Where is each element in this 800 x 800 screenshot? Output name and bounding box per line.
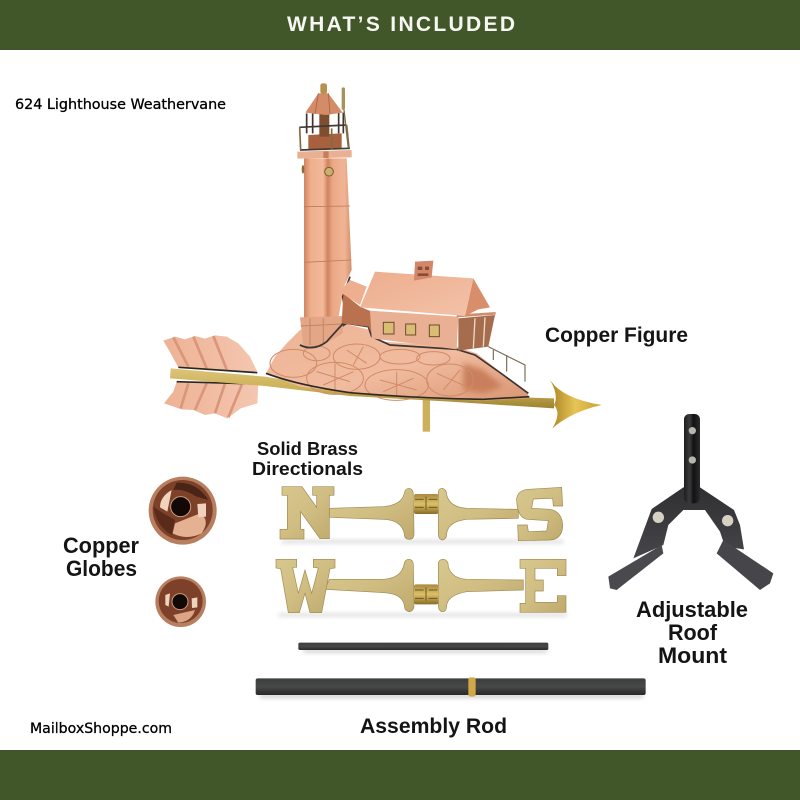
yoke [633,487,744,558]
label: copper figure: Copper Figure [545,324,688,347]
house [339,261,525,382]
north-south arm [280,487,563,541]
footer band [0,750,800,800]
letter N [280,487,334,539]
label: adjustable roof mount: Mount [658,643,728,668]
west-east arm [276,559,566,613]
adjustable roof mount [608,414,773,590]
port windows [325,167,333,176]
product name: 624 Lighthouse Weathervane [15,97,226,113]
copper globes [149,477,217,627]
letter W [276,559,335,613]
house wall [370,311,458,349]
stair railing [488,347,525,382]
chimney [414,261,433,281]
tower base [300,316,343,347]
brass collar [468,677,476,697]
title: WHAT’S INCLUDED [287,13,515,36]
arrow tail feathers [163,335,258,418]
porch [458,315,495,351]
label: adjustable roof mount [636,597,748,668]
annex [342,293,372,333]
gallery deck [297,150,352,159]
vertical mounting stem [423,398,430,432]
label: solid brass directionals: Directionals [252,459,363,479]
arrow head [549,378,602,428]
label: assembly rod: Assembly Rod [360,715,507,738]
tower [297,150,352,348]
label: adjustable roof mount: Roof [668,620,718,645]
roof [360,272,473,316]
label: copper globes: Copper [63,533,139,558]
bolts [653,427,733,526]
large globe [149,477,217,545]
windows [383,322,394,334]
header band [0,0,800,50]
left foot [608,545,663,590]
rocky island base [266,323,529,401]
thin rod [298,643,548,650]
tube [684,414,700,503]
label: solid brass directionals: Solid Brass [257,439,358,459]
letter S [517,487,563,541]
brass directionals [276,487,567,615]
assembly rods [256,643,646,698]
arrow shaft [170,368,554,408]
small globe [155,576,206,627]
copper figure: lighthouse weathervane [163,83,602,432]
right foot [717,540,773,590]
letter E [520,559,566,612]
label: adjustable roof mount: Adjustable [636,597,748,622]
thick rod [256,678,646,695]
label: copper globes [63,533,139,581]
website: MailboxShoppe.com [30,721,172,737]
rod shadows [260,649,643,698]
gable [465,278,490,316]
label: solid brass directionals [252,439,363,479]
label: copper globes: Globes [66,556,137,581]
lantern room [299,83,350,150]
letter shadows [278,542,567,615]
